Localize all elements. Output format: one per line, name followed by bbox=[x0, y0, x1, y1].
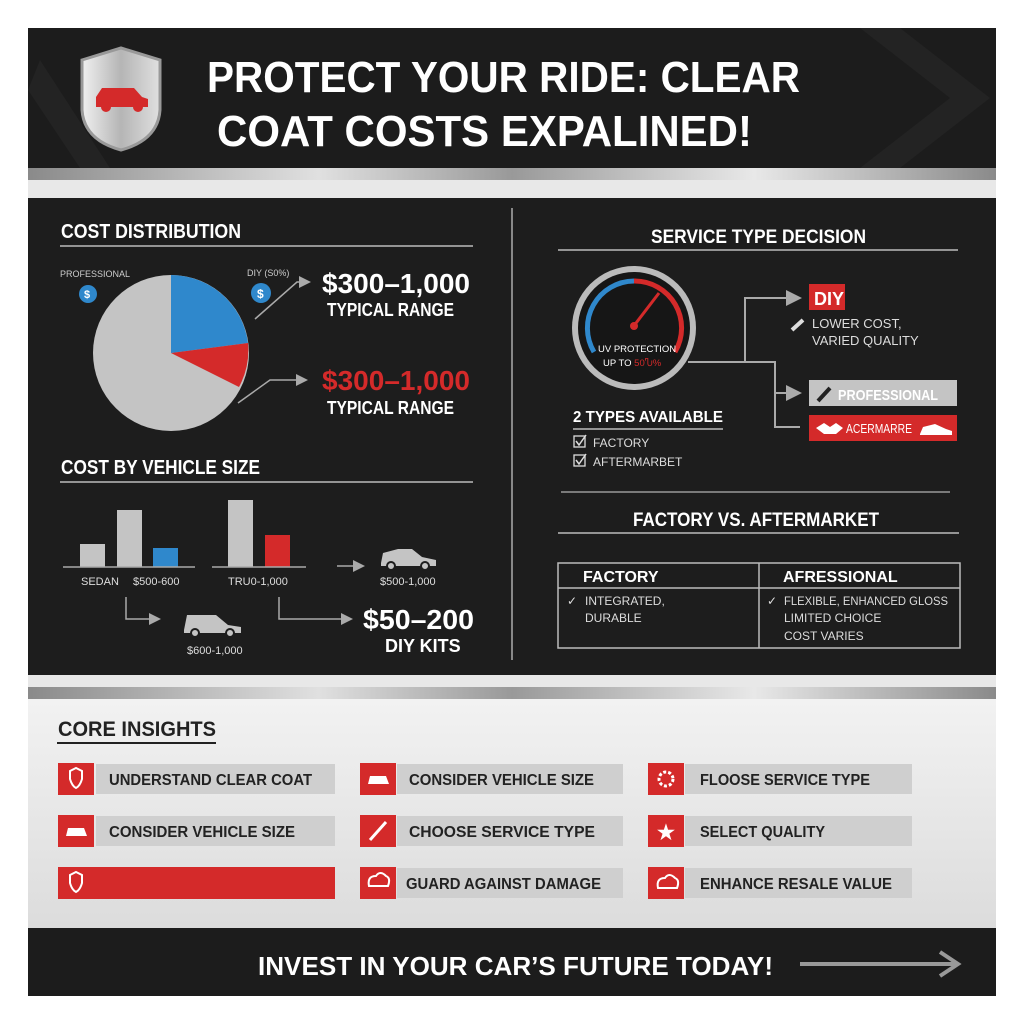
insight items: CHOOSE SERVICE TYPE bbox=[409, 824, 595, 841]
header banner bbox=[28, 28, 996, 168]
insight items: CONSIDER VEHICLE SIZE bbox=[109, 824, 295, 841]
callout: typical range: $300–1,000 bbox=[322, 268, 470, 299]
bar chart bbox=[63, 500, 306, 588]
pie chart: DIY (S0%) bbox=[247, 268, 289, 278]
panel: core insights: CORE INSIGHTS bbox=[58, 718, 216, 741]
option: diy bbox=[792, 284, 919, 348]
pie chart bbox=[60, 268, 308, 431]
decision arrows bbox=[688, 298, 800, 427]
callout: typical range bbox=[322, 268, 470, 418]
panel: service type decision: SERVICE TYPE DECISION bbox=[651, 227, 866, 248]
option: diy: LOWER COST, bbox=[812, 316, 902, 331]
insight items: GUARD AGAINST DAMAGE bbox=[406, 876, 601, 893]
insight items: FLOOSE SERVICE TYPE bbox=[700, 772, 870, 789]
comparison table: FLEXIBLE, ENHANCED GLOSS bbox=[784, 594, 948, 608]
comparison table: COST VARIES bbox=[784, 629, 864, 643]
bar chart: TRU0-1,000 bbox=[228, 576, 288, 588]
title: PROTECT YOUR RIDE: CLEAR bbox=[207, 53, 800, 102]
insight items: SELECT QUALITY bbox=[700, 824, 825, 841]
title bbox=[207, 53, 800, 156]
comparison table: DURABLE bbox=[585, 611, 642, 625]
arrow bbox=[800, 952, 958, 976]
comparison table: ✓ bbox=[567, 594, 577, 608]
option: aftermarket bbox=[809, 415, 957, 441]
option: diy: DIY bbox=[814, 289, 844, 309]
insight items: ENHANCE RESALE VALUE bbox=[700, 876, 892, 893]
panel: cost distribution: COST DISTRIBUTION bbox=[61, 221, 241, 243]
bar chart: SEDAN bbox=[81, 576, 119, 588]
comparison table: ✓ bbox=[767, 594, 777, 608]
types available: 2 TYPES AVAILABLE bbox=[573, 409, 723, 426]
types available: FACTORY bbox=[593, 436, 649, 450]
pie chart: PROFESSIONAL bbox=[60, 269, 130, 279]
bar chart: $500-600 bbox=[133, 576, 180, 588]
panel: cost by vehicle size bbox=[60, 457, 474, 657]
panel: service type decision bbox=[558, 227, 958, 492]
callout: diy kits: $50–200 bbox=[363, 604, 474, 635]
option: professional bbox=[809, 380, 957, 406]
callout: typical range: TYPICAL RANGE bbox=[327, 398, 454, 418]
arrows and cars: $600-1,000 bbox=[187, 645, 243, 657]
insight items bbox=[58, 763, 912, 899]
icon: gauge: UP TO 50Ⴠ% bbox=[603, 357, 662, 369]
panel: core insights bbox=[28, 699, 996, 928]
option: diy: VARIED QUALITY bbox=[812, 333, 919, 348]
pie chart: $ bbox=[257, 287, 264, 301]
arrows and cars: $500-1,000 bbox=[380, 576, 436, 588]
main dark panel bbox=[28, 198, 996, 675]
footer banner: INVEST IN YOUR CAR’S FUTURE TODAY! bbox=[258, 951, 773, 981]
icon: gauge: UV PROTECTION bbox=[598, 344, 676, 355]
panel: cost by vehicle size: COST BY VEHICLE SIZE bbox=[61, 457, 260, 479]
types available bbox=[573, 409, 723, 469]
icon: gauge bbox=[572, 266, 696, 390]
comparison table: INTEGRATED, bbox=[585, 594, 665, 608]
panel: cost distribution bbox=[60, 221, 473, 431]
pie chart: $ bbox=[84, 289, 90, 301]
title: COAT COSTS EXPALINED! bbox=[217, 107, 752, 156]
insight items: CONSIDER VEHICLE SIZE bbox=[409, 772, 594, 789]
comparison table: LIMITED CHOICE bbox=[784, 611, 881, 625]
comparison table bbox=[558, 563, 960, 648]
callout: diy kits: DIY KITS bbox=[385, 636, 461, 656]
callout: typical range: $300–1,000 bbox=[322, 365, 470, 396]
types available: AFTERMARBET bbox=[593, 455, 683, 469]
footer banner bbox=[28, 928, 996, 996]
insight items: UNDERSTAND CLEAR COAT bbox=[109, 772, 312, 789]
option: professional: PROFESSIONAL bbox=[838, 387, 938, 404]
icon: shield with car bbox=[82, 48, 160, 150]
insight items: ★ bbox=[657, 822, 675, 844]
callout: diy kits bbox=[363, 604, 474, 656]
panel: factory vs aftermarket: FACTORY VS. AFTERMARKET bbox=[633, 510, 879, 531]
comparison table: FACTORY bbox=[583, 569, 659, 586]
option: aftermarket: ACERMARRE bbox=[846, 421, 912, 436]
comparison table: AFRESSIONAL bbox=[783, 569, 898, 586]
arrows and cars bbox=[126, 549, 436, 657]
callout: typical range: TYPICAL RANGE bbox=[327, 300, 454, 320]
panel: factory vs aftermarket bbox=[558, 510, 960, 648]
